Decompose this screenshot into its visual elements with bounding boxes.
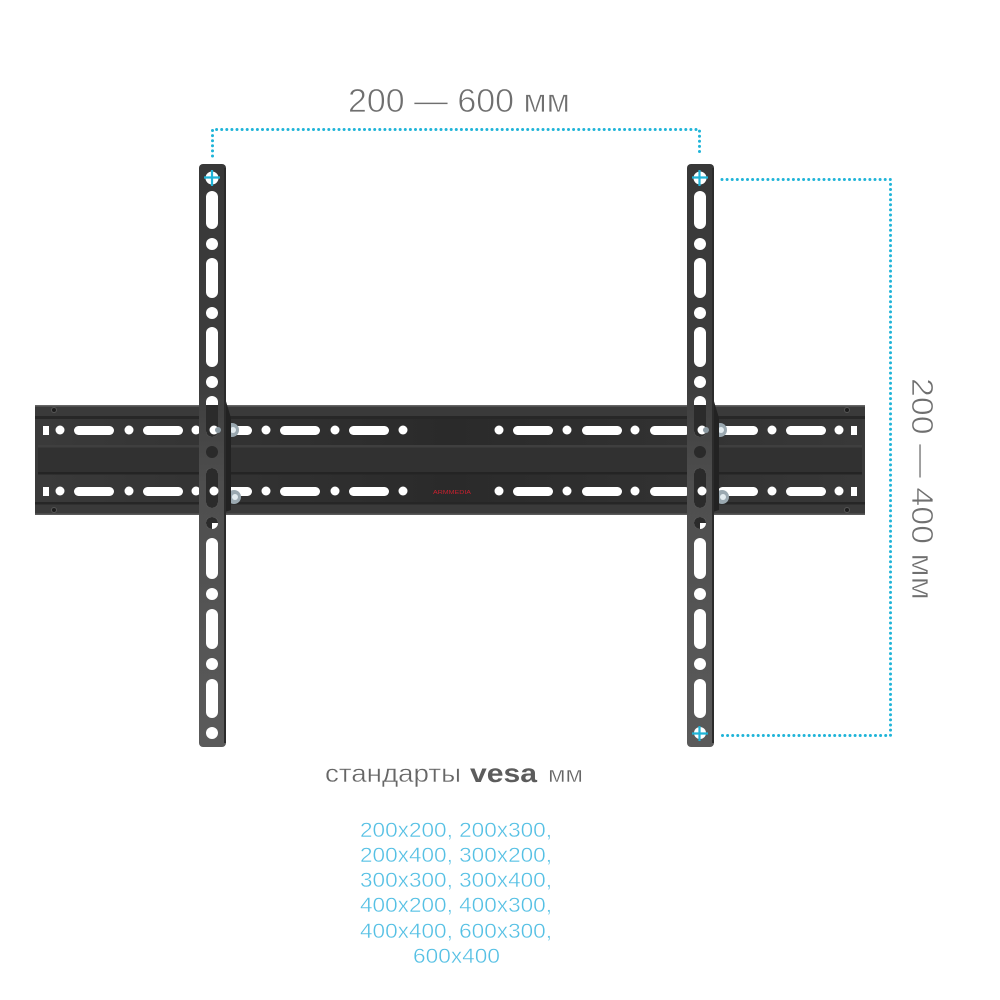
dimension line: horizontal <box>212 130 700 156</box>
strip holes <box>206 172 218 739</box>
list of VESA sizes: 200x200, 200x300, <box>360 819 552 842</box>
list of VESA sizes: 300x300, 300x400, <box>360 869 552 892</box>
rail holes: lower row <box>43 486 857 496</box>
icon: screw crosshair bottom right <box>692 726 708 741</box>
rail screws <box>52 408 850 512</box>
bolts <box>225 423 241 504</box>
list of VESA sizes: 200x400, 300x200, <box>360 844 552 867</box>
heading: VESA standards: мм <box>548 762 583 787</box>
icon: screw crosshair top right <box>692 170 708 186</box>
rail seen through strip slots <box>206 405 221 529</box>
heading: VESA standards: стандарты <box>325 760 461 788</box>
mounting rail <box>35 405 865 515</box>
brand logo: ARMMEDIA <box>433 490 471 496</box>
strip body <box>199 164 226 747</box>
rail holes: upper row <box>43 426 857 435</box>
list of VESA sizes: 600x400 <box>413 945 500 968</box>
icon: screw crosshair top left <box>204 170 220 186</box>
bracket <box>225 398 231 512</box>
heading: vertical distance: 200 — 400 мм <box>905 378 940 600</box>
left vertical strip <box>199 164 241 747</box>
right vertical strip <box>687 164 729 747</box>
list of VESA sizes: 400x400, 600x300, <box>360 920 552 943</box>
heading: VESA standards: vesa <box>470 758 538 788</box>
heading: horizontal distance: 200 — 600 мм <box>348 82 570 119</box>
list of VESA sizes: 400x200, 400x300, <box>360 894 552 917</box>
list of VESA sizes <box>360 819 552 968</box>
heading: VESA standards <box>325 758 583 788</box>
dimension line: vertical <box>722 180 890 736</box>
